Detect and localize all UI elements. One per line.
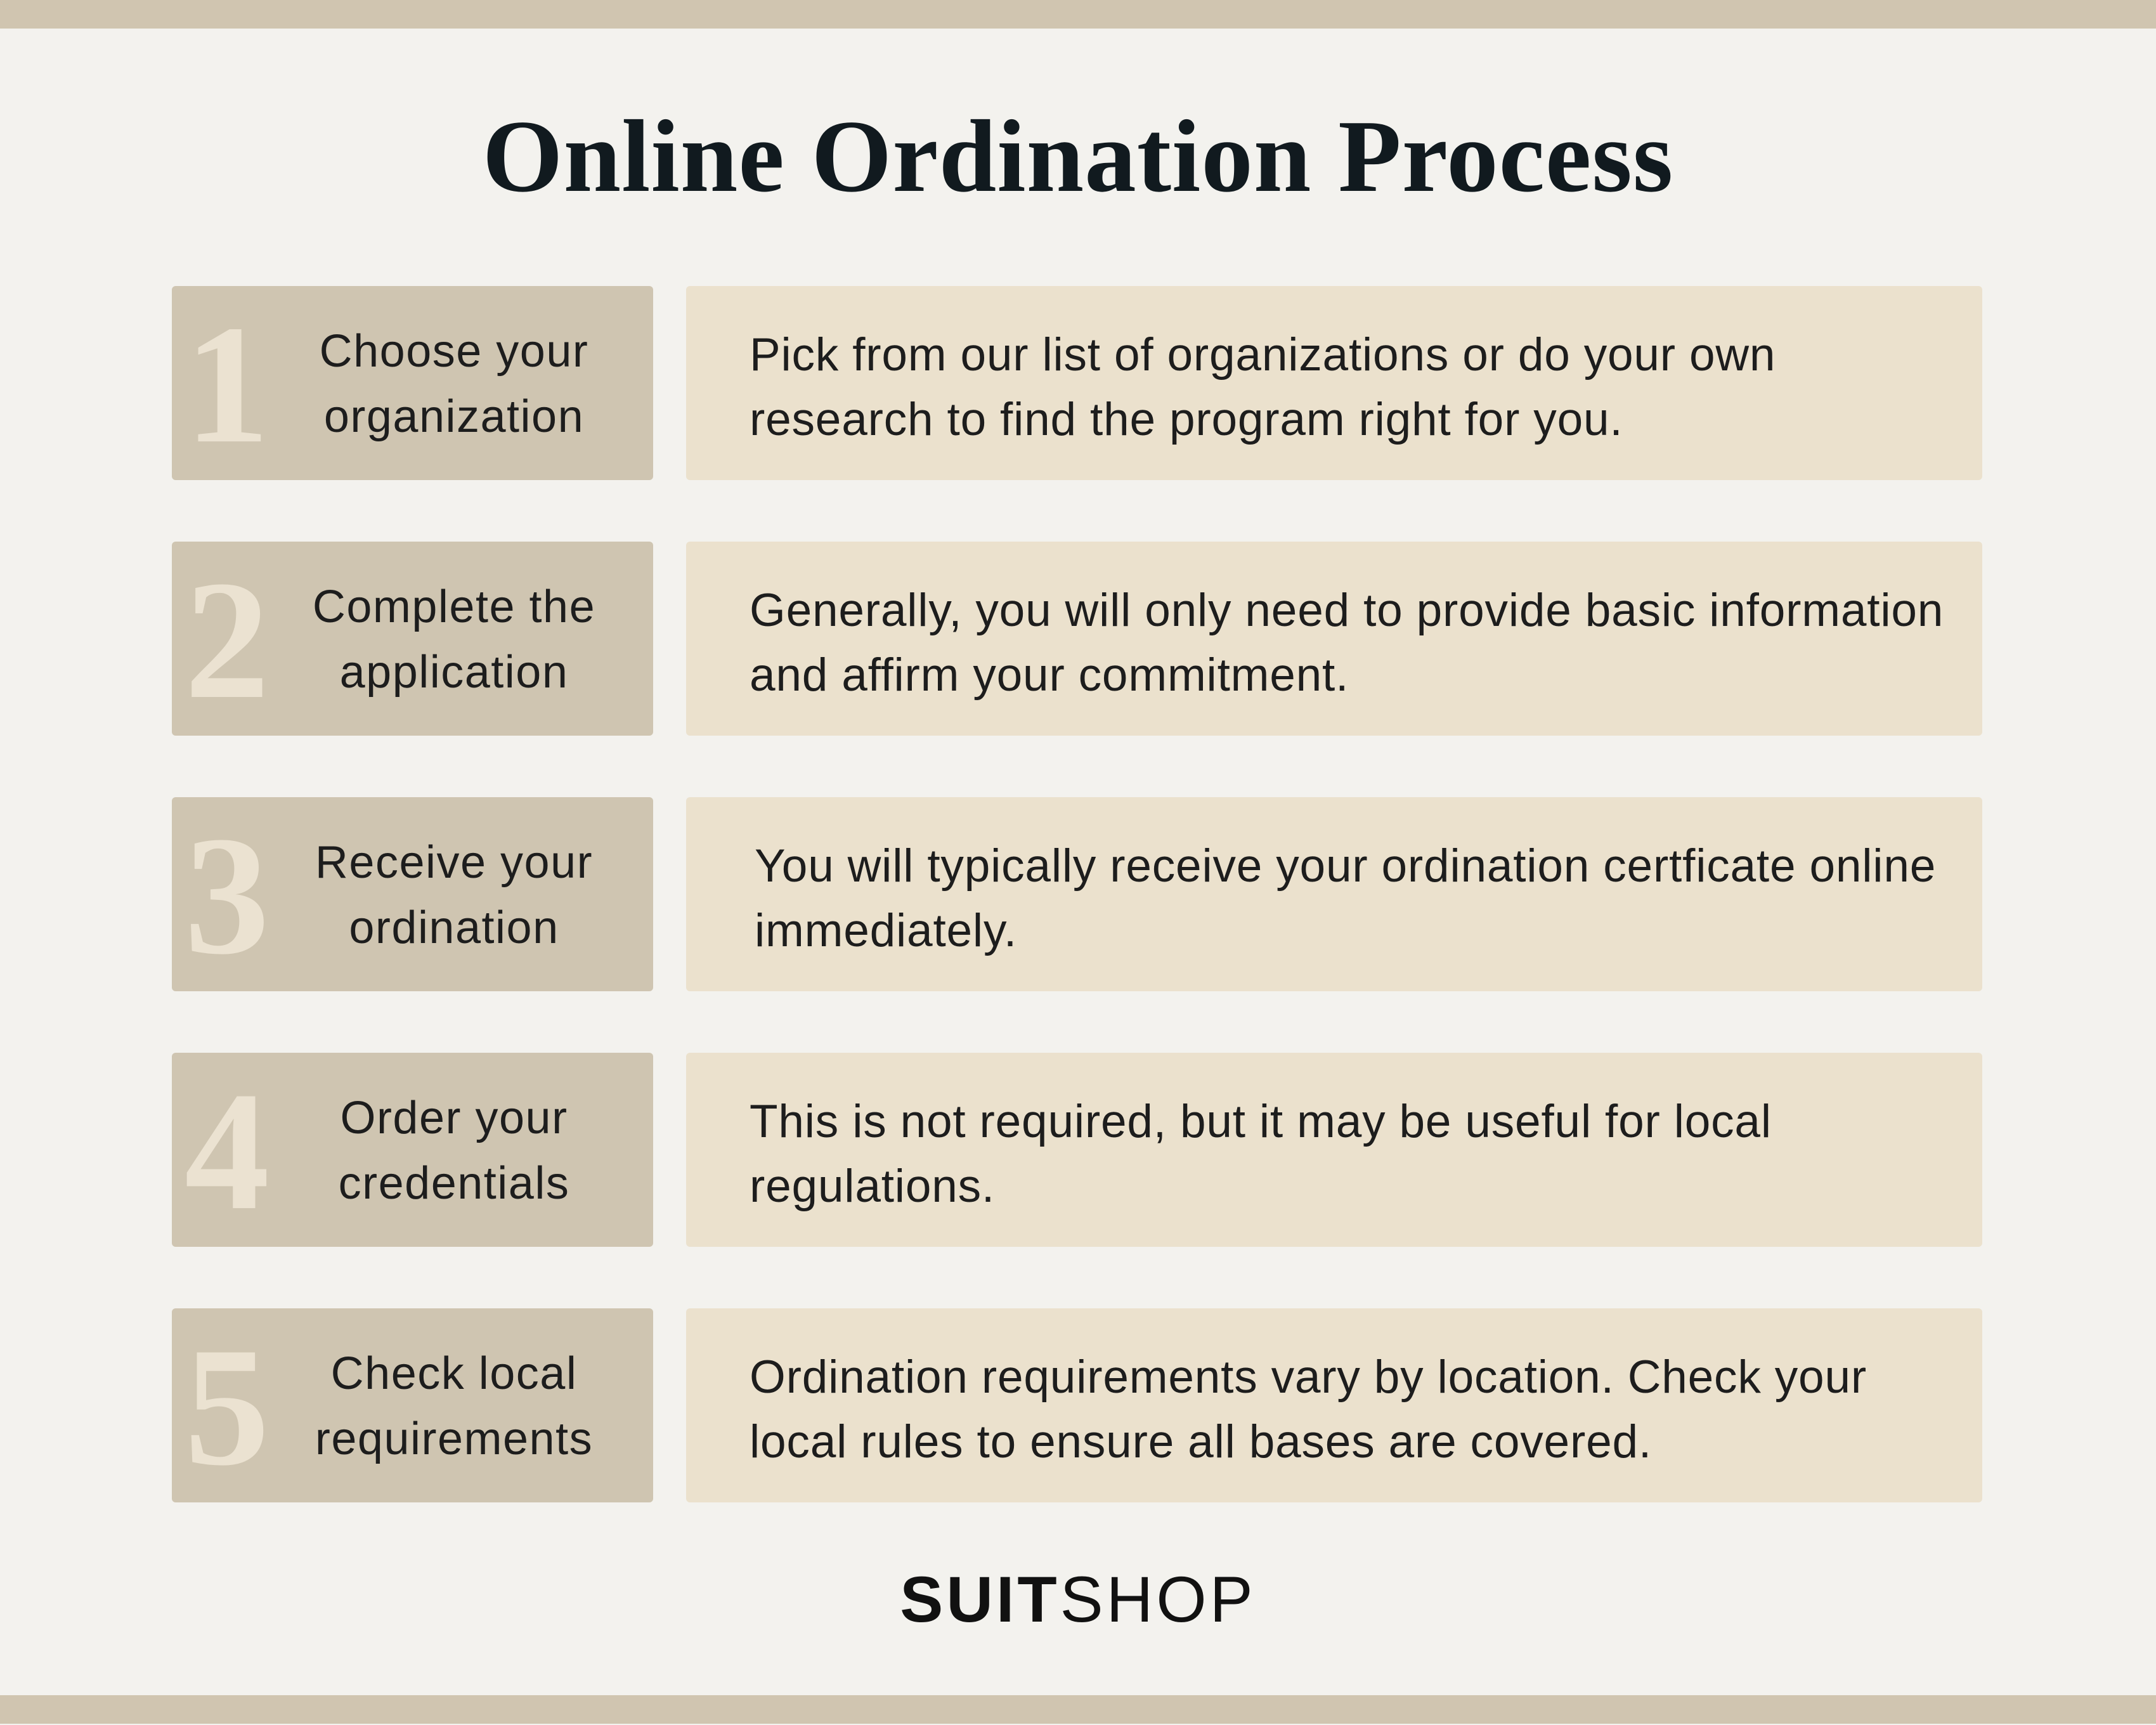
logo: SUITSHOP [900,1563,1256,1636]
step 3 label box: 3 [185,801,270,989]
step 1 label box: organization [324,391,584,442]
step 4 label box: credentials [339,1158,569,1209]
step 1 description [686,286,1982,480]
step 4 label box [172,1053,653,1247]
step 5 label box [172,1308,653,1502]
step 1 label box: Choose your [320,326,588,377]
step 2 description [686,542,1982,736]
step 2 label box: 2 [185,545,270,734]
step 4 label box: 4 [185,1057,270,1245]
step 1 description: Pick from our list of organizations or do your own [750,329,1776,381]
title: Online Ordination Process [483,100,1673,214]
step 4 description: This is not required, but it may be useful for local [750,1096,1772,1147]
panel: step 3 [172,797,1982,991]
step 4 label box: Order your [340,1093,568,1143]
panel: step 2 [172,542,1982,736]
step 3 label box: ordination [349,902,559,953]
step 2 label box: Complete the [313,582,595,632]
panel: step 4 [172,1053,1982,1247]
step 4 description [686,1053,1982,1247]
step 5 label box: Check local [331,1348,577,1399]
step 5 label box: 5 [185,1312,270,1500]
step 3 description: You will typically receive your ordination certficate online [755,840,1936,892]
step 1 description: research to find the program right for you. [750,394,1623,445]
step 3 label box: Receive your [315,837,593,888]
step 5 description: local rules to ensure all bases are covered. [750,1416,1652,1468]
step 5 label box: requirements [315,1414,593,1464]
step 3 description [686,797,1982,991]
step 3 label box [172,797,653,991]
step 2 description: and affirm your commitment. [750,649,1349,701]
step 4 description: regulations. [750,1161,995,1212]
step 5 description [686,1308,1982,1502]
step 2 label box: application [340,647,568,698]
step 3 description: immediately. [755,905,1017,956]
step 1 label box: 1 [185,290,270,478]
step 2 label box [172,542,653,736]
panel: step 1 [172,286,1982,480]
panel: step 5 [172,1308,1982,1502]
step 2 description: Generally, you will only need to provide basic information [750,585,1944,636]
step 1 label box [172,286,653,480]
step 5 description: Ordination requirements vary by location. Check your [750,1351,1867,1403]
